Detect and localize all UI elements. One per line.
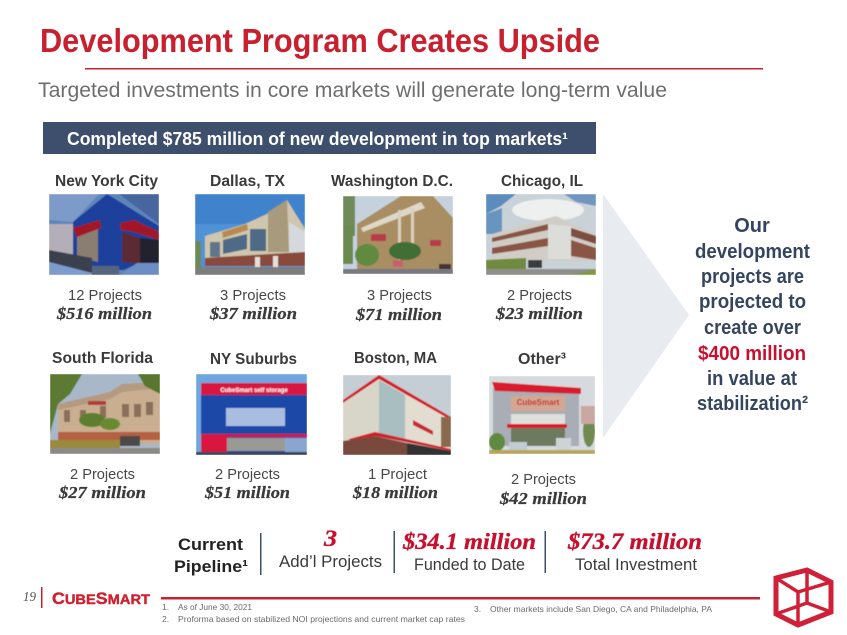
stat: funded to date: $34.1 million (402, 529, 536, 554)
title: Development Program Creates Upside (40, 22, 600, 59)
photo: Other (489, 376, 595, 454)
panel: Chicago: Chicago, IL (501, 173, 583, 190)
footnotes: 2. (162, 614, 169, 624)
arrow: chevron to value callout (603, 194, 689, 438)
icon: cube logo (776, 570, 831, 625)
panel: Washington D.C.: 3 Projects (367, 288, 432, 304)
photo: NY Suburbs: CubeSmart self storage (220, 388, 288, 394)
footnotes: As of June 30, 2021 (178, 602, 252, 612)
callout: value creation: Our (734, 215, 770, 237)
footnotes: 3. (474, 604, 481, 614)
banner: completed development (43, 122, 596, 154)
panel: Dallas (195, 173, 305, 323)
pipeline label: Current (178, 535, 243, 554)
footnotes (162, 602, 712, 624)
panel: Chicago: $23 million (495, 304, 583, 323)
photo: Boston (343, 375, 451, 455)
panel: South Florida (50, 350, 160, 502)
footer rule (161, 597, 760, 600)
panel: Boston: $18 million (352, 483, 438, 502)
panel: Washington D.C.: $71 million (355, 305, 442, 324)
photo: New York City (49, 194, 159, 275)
panel: Other: Other³ (518, 351, 566, 368)
panel: NY Suburbs: $51 million (204, 483, 290, 502)
panel: Boston: Boston, MA (354, 350, 437, 367)
callout: value creation: $400 million (698, 343, 806, 365)
stat: additional projects (279, 526, 382, 571)
callout: value creation: development (695, 241, 810, 263)
panel: Dallas: 3 Projects (220, 288, 286, 304)
panel: New York City (49, 173, 159, 323)
stat: total investment: $73.7 million (567, 529, 702, 554)
stat: additional projects: 3 (323, 526, 337, 551)
panel: Washington D.C. (331, 173, 453, 324)
panel: New York City: New York City (55, 173, 158, 190)
panel: Chicago: 2 Projects (507, 288, 572, 304)
footnotes: 1. (162, 602, 169, 612)
photo: NY Suburbs (196, 374, 307, 455)
panel: Dallas: Dallas, TX (210, 173, 285, 190)
stat: total investment (567, 529, 702, 574)
stat: funded to date (402, 529, 536, 574)
panel: Boston: 1 Project (368, 467, 427, 483)
stat: total investment: Total Investment (575, 556, 697, 574)
photo: Chicago (486, 194, 596, 275)
panel: Other: $42 million (499, 489, 587, 508)
callout: value creation: stabilization² (697, 393, 808, 415)
panel: NY Suburbs (196, 351, 307, 502)
panel: South Florida: $27 million (58, 483, 146, 502)
footnotes: Proforma based on stabilized NOI projections and current market cap rates (178, 614, 465, 624)
stat: additional projects: Add’l Projects (279, 553, 382, 571)
photo: Washington D.C. (343, 196, 453, 274)
panel: South Florida: 2 Projects (70, 467, 135, 483)
current pipeline stats (174, 526, 702, 576)
panel: New York City: $516 million (56, 304, 152, 323)
panel: Washington D.C.: Washington D.C. (331, 173, 453, 190)
pipeline label (174, 535, 248, 576)
panel: Dallas: $37 million (209, 304, 297, 323)
callout: value creation: projects are (701, 266, 804, 288)
callout: value creation: in value at (707, 368, 797, 390)
stat: funded to date: Funded to Date (414, 556, 525, 574)
panel: Other (489, 351, 595, 508)
page number: 19 (23, 590, 36, 605)
logo: CubeSmart wordmark: CUBESMART (52, 589, 150, 608)
photo: Dallas (195, 194, 305, 275)
callout: value creation: projected to (699, 291, 806, 313)
photo: Other: CubeSmart (517, 398, 560, 407)
panel: South Florida: South Florida (52, 350, 153, 367)
panel: Boston (343, 350, 451, 502)
panel: New York City: 12 Projects (68, 288, 142, 304)
photo: South Florida (50, 374, 160, 454)
panel: NY Suburbs: 2 Projects (215, 467, 280, 483)
callout: value creation (695, 215, 810, 415)
footnotes: Other markets include San Diego, CA and Philadelphia, PA (490, 604, 712, 614)
panel: Other: 2 Projects (511, 472, 576, 488)
panel: Chicago (486, 173, 596, 323)
pipeline label: Pipeline¹ (174, 557, 248, 576)
callout: value creation: create over (704, 317, 801, 339)
panel: NY Suburbs: NY Suburbs (210, 351, 297, 368)
subtitle: Targeted investments in core markets will generate long-term value (38, 79, 667, 102)
banner: completed development: Completed $785 million of new development in top markets¹ (67, 129, 568, 149)
